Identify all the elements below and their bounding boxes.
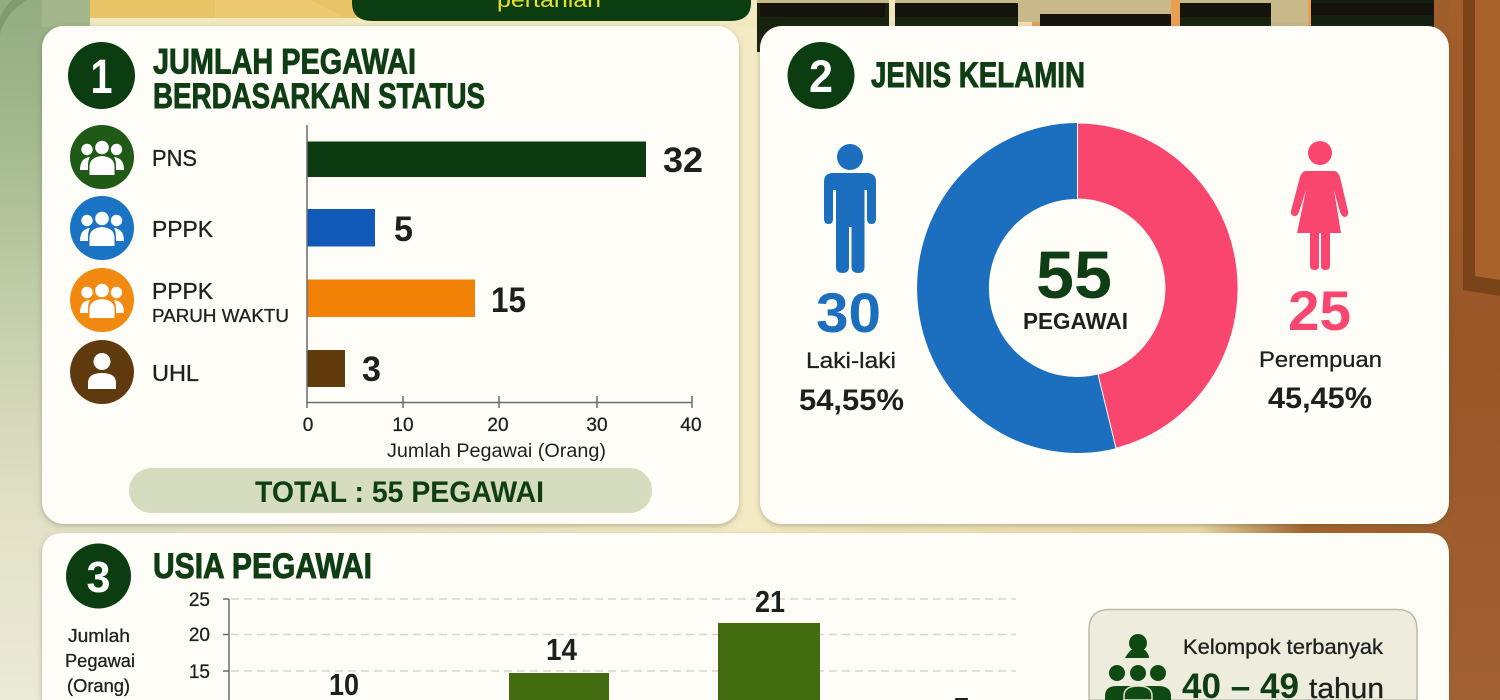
donut chart (917, 123, 1238, 453)
panel: jumlah pegawai (42, 26, 739, 524)
heading: JUMLAH PEGAWAI (153, 42, 416, 82)
bar chart: usia: 25 (189, 590, 210, 611)
male count: Laki-laki (806, 348, 896, 373)
bar chart: status: 10 (392, 415, 414, 436)
header pill: pertanian (352, 0, 751, 21)
icon: PPPK paruh waktu group (70, 268, 134, 332)
heading: JENIS KELAMIN (871, 55, 1085, 95)
icon: people crowd (1105, 634, 1171, 700)
bar chart: status: 40 (680, 415, 702, 436)
y axis title (65, 626, 135, 696)
female count (1259, 279, 1382, 415)
bar chart: status (303, 125, 703, 462)
bar chart: usia: 14 (546, 632, 578, 667)
status labels: PNS (152, 145, 197, 171)
heading: BERDASARKAN STATUS (153, 76, 485, 116)
bar chart: status: 20 (487, 415, 509, 436)
bar chart: status: 32 (663, 141, 703, 180)
icon: female (1291, 141, 1348, 270)
bar chart: status: Jumlah Pegawai (Orang) (387, 441, 606, 462)
header strip: yellow banner (42, 0, 760, 27)
header officers illustration (757, 0, 1434, 52)
total pill (129, 468, 652, 513)
total pill: TOTAL : 55 PEGAWAI (255, 476, 544, 509)
female count: Perempuan (1259, 347, 1382, 372)
y axis title: Pegawai (65, 651, 135, 671)
status labels: UHL (152, 360, 199, 386)
donut chart: PEGAWAI (1023, 308, 1128, 334)
female count: 45,45% (1268, 382, 1372, 415)
heading (153, 42, 485, 116)
bar chart: usia: 20 (189, 625, 210, 646)
callout: kelompok terbanyak: Kelompok terbanyak (1183, 636, 1384, 659)
badge 3 (66, 544, 131, 608)
y axis title: (Orang) (67, 676, 130, 696)
donut chart: 55 (1036, 238, 1112, 313)
icon: PPPK group (70, 196, 134, 260)
status labels: PPPK (152, 216, 214, 242)
bar chart: status: 30 (586, 415, 608, 436)
male count: 54,55% (799, 384, 904, 417)
icon: PNS group (70, 125, 134, 189)
icon: UHL person (70, 340, 134, 404)
icon: male (824, 144, 876, 273)
female count: 25 (1288, 279, 1351, 342)
y axis title: Jumlah (68, 626, 130, 646)
bar chart: usia: 15 (189, 662, 210, 683)
badge 2 (788, 42, 854, 109)
male count (799, 281, 904, 417)
bar chart: status: 15 (491, 281, 526, 320)
bar chart: usia: 21 (755, 584, 785, 619)
heading: USIA PEGAWAI (153, 546, 372, 586)
callout: kelompok terbanyak (1089, 610, 1417, 700)
panel: jenis kelamin (760, 26, 1449, 524)
status labels: PARUH WAKTU (152, 306, 289, 326)
bar chart: status: 5 (394, 210, 413, 249)
badge 1 (68, 42, 135, 109)
badge 2: 2 (809, 51, 833, 102)
badge 1: 1 (90, 51, 112, 104)
badge 3: 3 (86, 553, 110, 602)
male count: 30 (816, 281, 881, 344)
bar chart: status: 0 (303, 415, 313, 436)
panel: usia pegawai (42, 533, 1449, 700)
status labels: PPPK (152, 278, 214, 304)
bar chart: status: 3 (362, 350, 381, 389)
bar chart: usia (189, 584, 1016, 700)
status labels (152, 145, 289, 386)
